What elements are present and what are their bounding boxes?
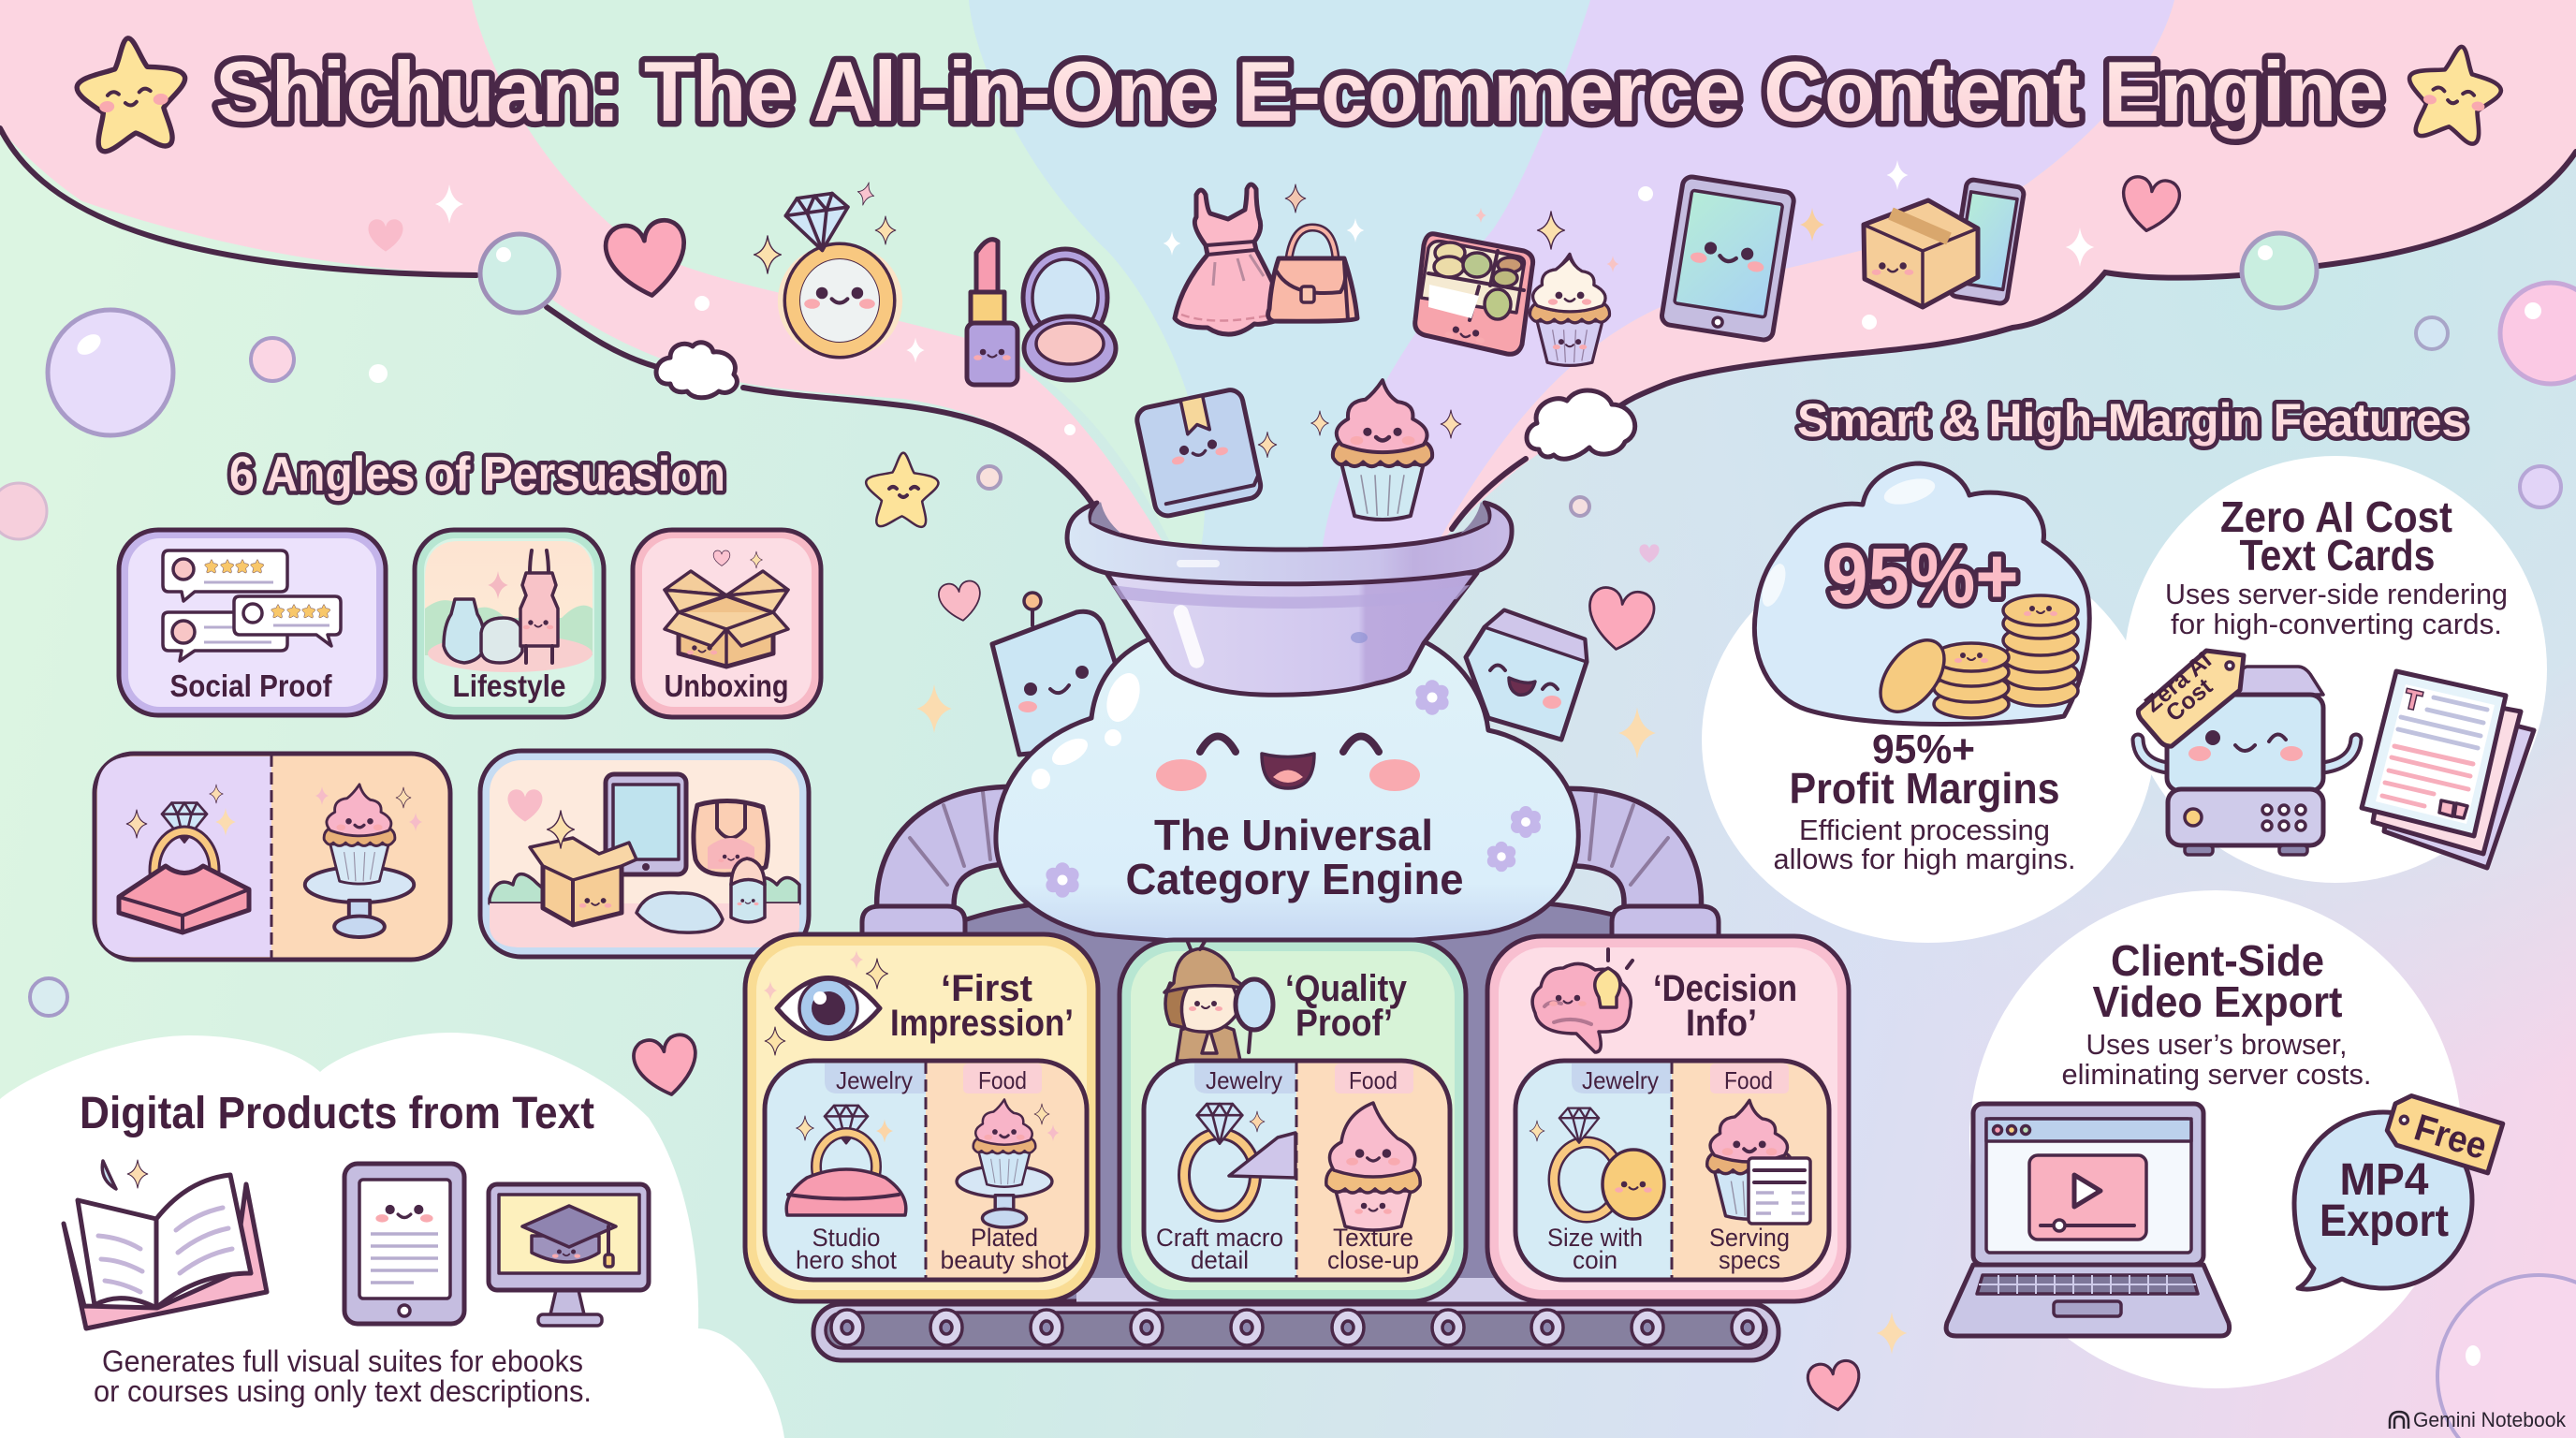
icon: bento box [1415,234,1533,354]
panel: white bubbles [1702,456,2547,1388]
tab labels: Food [1724,1066,1773,1094]
captions: Size with [1547,1224,1643,1252]
icon: ring on pillow [119,785,249,932]
card: unboxing [633,530,821,717]
text: profit margins: Profit Margins [1790,764,2059,813]
title: Shichuan: The All-in-One E-commerce Content Engine [215,45,2383,139]
icon: detective [1164,940,1273,1061]
callout: MP4 export bubble: MP4 [2340,1155,2429,1205]
card: first impression [745,934,1098,1301]
text: client-side video export: Video Export [2093,977,2342,1026]
icon: bag [694,800,768,874]
text: profit margins: allows for high margins. [1773,843,2076,875]
icon: ebook tablet [344,1164,464,1324]
cloud: left connector [656,343,737,398]
captions: Texture [1333,1224,1413,1252]
funnel outline curves [0,128,2576,529]
text: zero AI cost: Text Cards [2239,531,2436,580]
label: Unboxing [665,668,788,703]
text: zero AI cost [2165,492,2508,640]
card: ring and cupcake split [95,754,450,960]
text: digital products description: Generates full visual suites for ebooks [102,1344,583,1378]
hearts [368,175,2181,1414]
label: Lifestyle [453,668,565,703]
cloud: right connector [1527,390,1635,459]
captions: specs [1719,1246,1780,1274]
icon: lifestyle scene [425,541,593,672]
pipe: left [862,792,1025,936]
funnel body [1106,573,1477,695]
tab labels: Food [978,1066,1027,1094]
text: zero AI cost: Zero AI Cost [2220,492,2452,541]
icon: bottle [731,858,765,922]
heading [890,968,1074,1044]
card: product scene [480,751,809,957]
heading [1653,968,1797,1044]
conveyor belt [813,1304,1778,1360]
icon: course monitor [489,1184,649,1326]
icon: right star [2402,40,2507,147]
tab labels: Jewelry [1582,1066,1659,1094]
icon: eye [764,950,888,1055]
icon: pink dress [1175,184,1288,334]
captions [1547,1224,1790,1274]
callout: MP4 export bubble [2294,1112,2472,1289]
text: client-side video export: Uses user’s browser, [2086,1028,2348,1061]
conveyor legs [1076,1278,1535,1311]
captions: detail [1191,1246,1249,1274]
label: Social Proof [170,668,332,703]
icon: small star [866,453,938,527]
icon: compact mirror [1023,249,1116,380]
icon: lipstick [967,240,1017,385]
icon: review bubbles [163,550,341,661]
text: profit margins [1773,726,2076,875]
comparison panel [1144,1061,1450,1280]
captions: close-up [1327,1246,1419,1274]
heading [1285,968,1408,1044]
icon: flying box [1134,388,1263,518]
tag: free [2384,1092,2503,1173]
tab labels [1582,1066,1773,1094]
robot hand: left cube [992,593,1116,755]
heading: ‘Quality [1285,968,1408,1009]
tab labels: Jewelry [1206,1066,1282,1094]
heading: Info’ [1686,1003,1757,1044]
captions: hero shot [796,1246,897,1274]
captions: coin [1573,1246,1617,1274]
icon: flying cupcake [1333,380,1432,520]
top colour funnel bands [0,0,2576,562]
text: zero AI cost: for high-converting cards. [2171,608,2502,640]
icon: text card stack [2362,671,2534,868]
icon: laptop with video [1946,1104,2230,1336]
heading: digital products: Digital Products from Text [80,1089,594,1138]
callout: MP4 export bubble: Export [2320,1196,2449,1246]
icon: ring with coin [1530,1108,1664,1219]
icon: handbag [1268,227,1357,321]
text: profit margins: 95%+ [1872,726,1975,772]
icon: ring on cushion [786,1106,906,1215]
watermark: gemini notebook: Gemini Notebook [2413,1408,2567,1431]
captions: Craft macro [1156,1224,1283,1252]
text: profit margins: Efficient processing [1799,814,2050,846]
engine label: The Universal [1154,811,1433,859]
icon: cupcake on stand [305,785,422,937]
cloud: 95 percent [1754,463,2089,725]
heading: Proof’ [1295,1003,1393,1044]
tab labels [836,1066,1027,1094]
captions [796,1224,1069,1274]
icon: cupcake on stand [957,1099,1059,1227]
text: client-side video export: eliminating server costs. [2061,1058,2372,1091]
text: zero AI cost: Uses server-side rendering [2165,578,2508,610]
engine label [1125,811,1464,903]
machine back plate [945,902,1657,1301]
tag: free: Free [2409,1107,2492,1167]
captions: Serving [1709,1224,1790,1252]
tag: zera AI cost [2138,647,2244,746]
card: quality proof [1120,940,1466,1301]
text: digital products description [94,1344,592,1408]
comparison panel [1515,1061,1829,1280]
icon: smiling diamond ring [778,191,902,357]
tab labels: Food [1349,1066,1398,1094]
heading: 6 angles: 6 Angles of Persuasion [229,448,725,502]
icon: brain and lightbulb [1532,949,1632,1052]
pipe: right [1559,792,1719,936]
icon: cupcake close-up [1326,1103,1420,1230]
icon: text card stack: T [2402,683,2424,716]
card: decision info [1487,936,1849,1301]
captions: Plated [971,1224,1038,1252]
heading: ‘Decision [1653,968,1797,1009]
robot hand: right cube [1466,610,1587,740]
icon: tablet [606,774,686,874]
text: client-side video export [2061,936,2372,1091]
icon: tablet with face [1661,176,1795,341]
heading: ‘First [941,968,1032,1009]
icon: open parcel [530,838,637,925]
card: lifestyle [415,530,604,717]
heading: smart features: Smart & High-Margin Features [1797,394,2467,447]
stat: 95%+ on cloud: 95%+ [1827,532,2018,620]
funnel rim [1067,502,1512,584]
tag: zera AI cost: Zera AI [2140,647,2217,718]
flowers on engine [1046,680,1541,898]
captions [1156,1224,1419,1274]
heading: Impression’ [890,1003,1074,1044]
captions: beauty shot [940,1246,1069,1274]
engine cloud body [996,639,1578,944]
comparison panel [765,1061,1087,1280]
tab labels [1206,1066,1398,1094]
icon: ring with magnifier [1184,1104,1295,1216]
rollers [831,1310,1764,1345]
icon: top cupcake [1530,254,1610,365]
tag: zera AI cost: Cost [2161,673,2218,726]
icon: parcel and phone [1864,179,2025,307]
text: client-side video export: Client-Side [2111,936,2324,985]
card: social proof [119,530,386,715]
icon: open book [64,1160,267,1328]
engine face [1156,736,1420,791]
icon: cute server robot [2138,667,2356,855]
captions: Studio [812,1224,880,1252]
icon: fabric [637,892,723,932]
icon: cupcake with spec sheet [1707,1100,1810,1224]
icon: open box [665,550,788,667]
panel: digital products blob [0,1033,784,1438]
bubble: large bottom right [2437,1275,2576,1438]
engine label: Category Engine [1125,855,1464,903]
icon: coin stacks [1867,595,2078,724]
icon: left star [72,33,192,154]
text: digital products description: or courses using only text descriptions. [94,1374,592,1408]
tab labels: Jewelry [836,1066,913,1094]
